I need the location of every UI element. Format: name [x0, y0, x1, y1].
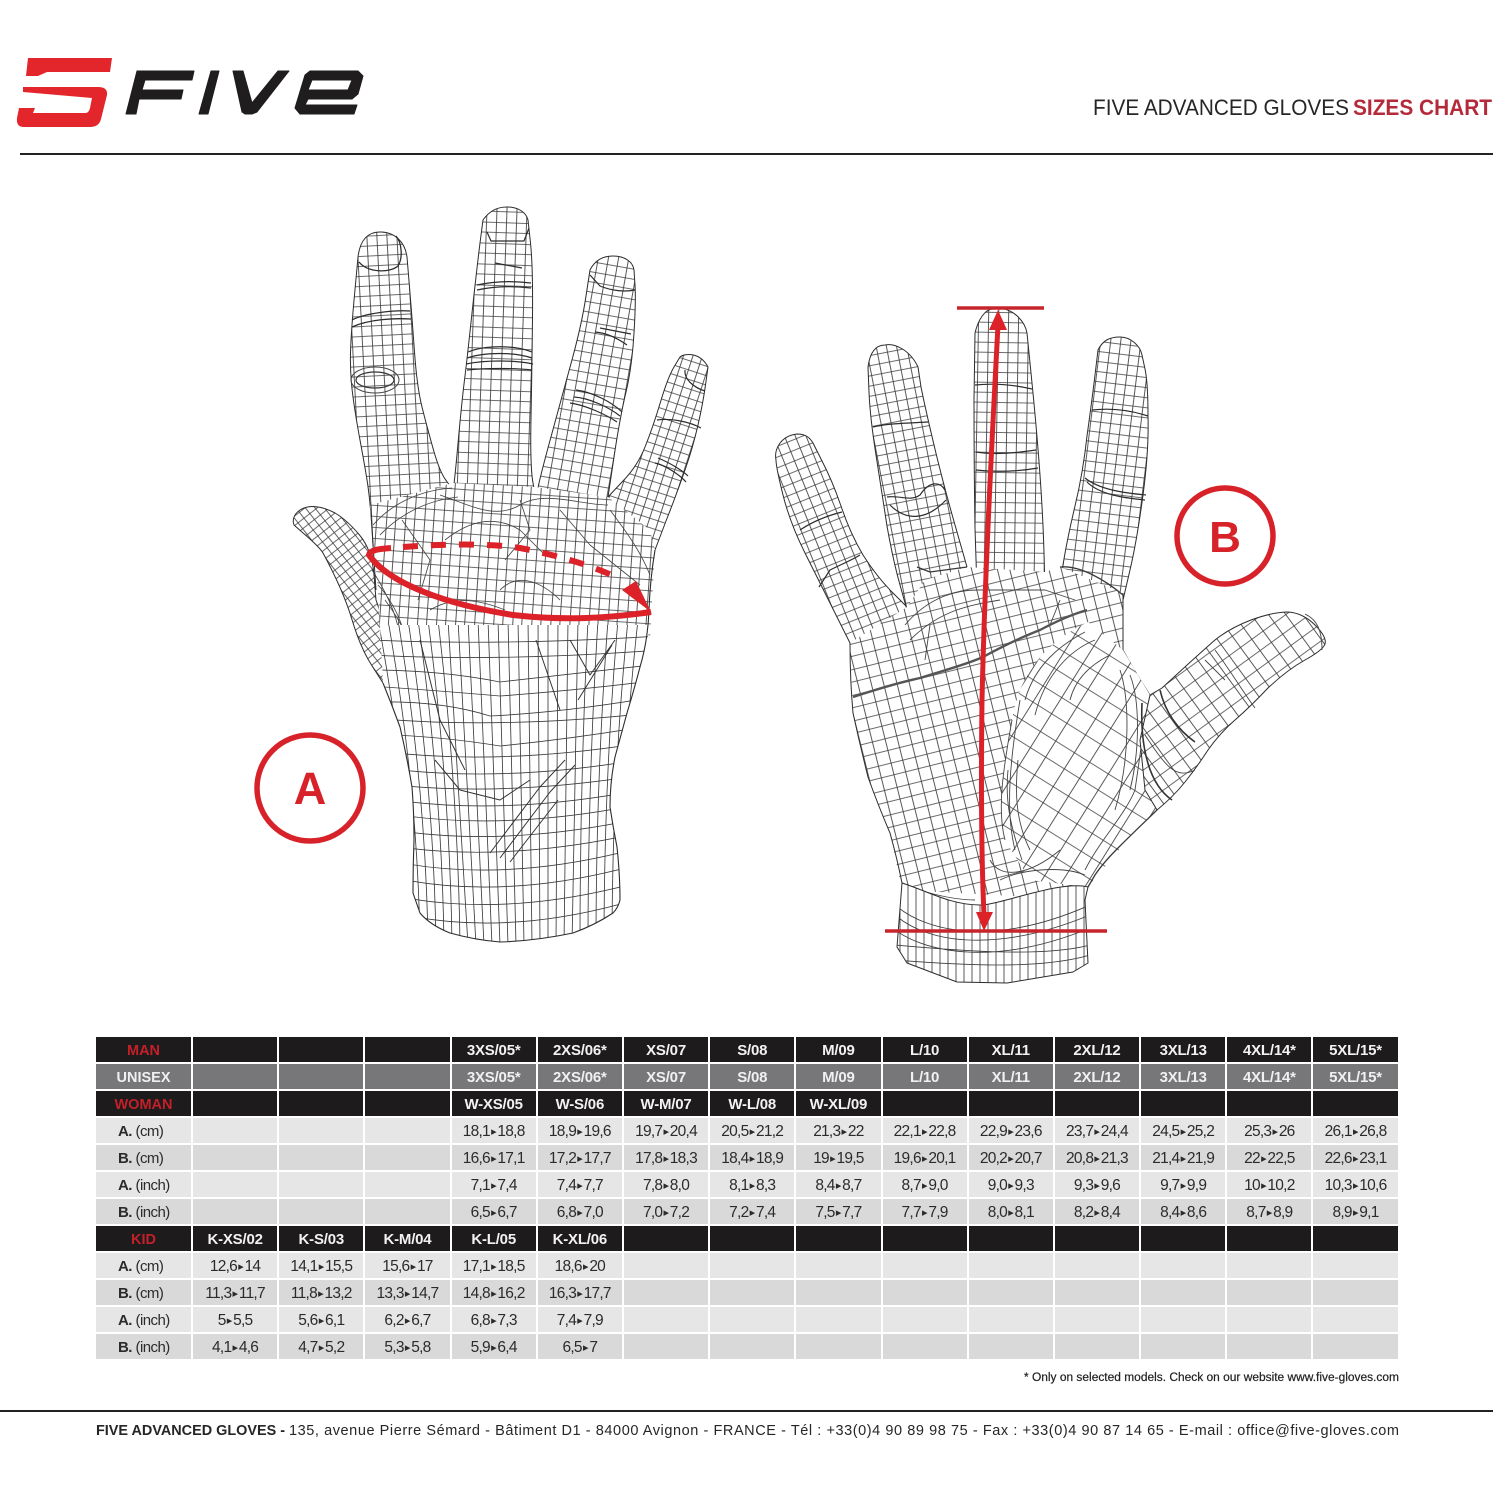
row: kid A inch — [96, 1307, 1398, 1332]
logo wordmark — [126, 71, 363, 114]
finger A1 — [350, 232, 453, 545]
finger B2 — [868, 345, 967, 610]
row: man sizes: MAN — [127, 1043, 160, 1059]
back of hand A mesh — [380, 625, 648, 942]
row: adult B inch: 8,9▸9,1 — [1332, 1204, 1379, 1221]
row: adult B cm: 21,4▸21,9 — [1152, 1150, 1214, 1167]
row: adult B inch: B. (inch) — [118, 1204, 170, 1221]
row: unisex sizes: M/09 — [822, 1069, 855, 1086]
row: adult A inch: 7,1▸7,4 — [471, 1177, 517, 1194]
row: adult A cm: 22,9▸23,6 — [980, 1123, 1042, 1140]
row: adult B inch: 8,4▸8,6 — [1160, 1204, 1206, 1221]
row: woman sizes: W-M/07 — [641, 1096, 692, 1113]
row: kid sizes: K-L/05 — [471, 1231, 516, 1248]
row: kid A cm: 12,6▸14 — [210, 1258, 260, 1275]
row: unisex sizes: 3XS/05* — [467, 1069, 520, 1086]
row: woman sizes: W-XL/09 — [810, 1096, 867, 1113]
row: adult A inch: 10▸10,2 — [1244, 1177, 1295, 1194]
size table — [96, 1037, 1398, 1359]
row: adult B cm — [96, 1145, 1398, 1170]
row: unisex sizes: L/10 — [910, 1069, 939, 1086]
row: man sizes: L/10 — [910, 1042, 939, 1059]
row: adult A inch: 8,4▸8,7 — [815, 1177, 861, 1194]
hand B: palm wireframe — [776, 308, 1325, 983]
row: adult A inch: 10,3▸10,6 — [1325, 1177, 1386, 1194]
footnote: * Only on selected models. Check on our website www.five-gloves.com — [1024, 1372, 1399, 1384]
row: adult B cm: 19,6▸20,1 — [894, 1150, 956, 1167]
row: kid B cm — [96, 1280, 1398, 1305]
row: man sizes: XL/11 — [992, 1042, 1030, 1059]
row: man sizes: XS/07 — [646, 1042, 686, 1059]
row: adult A cm: 19,7▸20,4 — [635, 1123, 697, 1140]
row: woman sizes: W-XS/05 — [464, 1096, 523, 1113]
row: unisex sizes: 4XL/14* — [1243, 1069, 1296, 1086]
row: kid B cm: 16,3▸17,7 — [549, 1285, 611, 1302]
row: kid B cm: 11,3▸11,7 — [205, 1285, 265, 1302]
row: adult A cm: 22,1▸22,8 — [894, 1123, 956, 1140]
row: man sizes — [96, 1037, 1398, 1062]
row: man sizes: 2XS/06* — [553, 1042, 607, 1059]
row: adult A inch — [96, 1172, 1398, 1197]
heading: sizes chart — [1093, 95, 1493, 120]
row: adult A cm: 26,1▸26,8 — [1325, 1123, 1386, 1140]
row: adult A inch: 9,3▸9,6 — [1074, 1177, 1120, 1194]
finger B3 — [974, 308, 1045, 590]
row: adult A cm: A. (cm) — [118, 1123, 163, 1140]
row: kid sizes: K-XS/02 — [207, 1231, 263, 1248]
row: adult B inch: 6,5▸6,7 — [471, 1204, 517, 1221]
row: man sizes: 3XS/05* — [467, 1042, 520, 1059]
row: adult B cm: 18,4▸18,9 — [721, 1150, 783, 1167]
row: adult A cm: 24,5▸25,2 — [1152, 1123, 1214, 1140]
row: kid sizes: K-XL/06 — [553, 1231, 607, 1248]
measurement arrow B: length with end bars — [885, 308, 1107, 931]
row: kid B inch: 6,5▸7 — [562, 1339, 597, 1356]
row: adult A inch: 7,4▸7,7 — [557, 1177, 603, 1194]
row: man sizes: M/09 — [822, 1042, 855, 1059]
badge A — [257, 735, 363, 841]
palm ball mesh B — [1001, 622, 1160, 887]
row: adult A inch: 8,1▸8,3 — [729, 1177, 775, 1194]
row: kid sizes — [96, 1226, 1398, 1251]
row: adult A cm: 25,3▸26 — [1244, 1123, 1295, 1140]
row: adult A inch: A. (inch) — [118, 1177, 170, 1194]
row: woman sizes: W-L/08 — [728, 1096, 776, 1113]
measurement arrow A: dashed and solid curve — [369, 544, 651, 618]
logo icon: red S mark — [17, 58, 112, 127]
row: adult A cm: 18,9▸19,6 — [549, 1123, 611, 1140]
row: unisex sizes: 3XL/13 — [1160, 1069, 1207, 1086]
row: woman sizes: W-S/06 — [556, 1096, 604, 1113]
row: adult B cm: 17,8▸18,3 — [635, 1150, 697, 1167]
finger B4 — [1060, 337, 1148, 600]
row: kid A cm: 18,6▸20 — [555, 1258, 605, 1275]
row: adult B cm: 17,2▸17,7 — [549, 1150, 611, 1167]
row: kid A cm: A. (cm) — [118, 1258, 163, 1275]
footer address: 135, avenue Pierre Sémard - Bâtiment D1 - 84000 Avignon - FRANCE - Tél : +33(0)4 90 89 98 75 - Fax : +33(0)4 90 87 14 65 - E-mail : office@five-gloves.com — [289, 1423, 1399, 1439]
row: adult B inch: 6,8▸7,0 — [557, 1204, 603, 1221]
footer address: FIVE ADVANCED GLOVES - — [96, 1423, 285, 1439]
row: adult B inch: 7,2▸7,4 — [729, 1204, 775, 1221]
palm A — [370, 483, 655, 660]
row: kid B inch: 5,3▸5,8 — [384, 1339, 431, 1356]
row: kid sizes: K-S/03 — [299, 1231, 344, 1248]
row: adult B cm: 22,6▸23,1 — [1325, 1150, 1386, 1167]
row: unisex sizes: 2XL/12 — [1073, 1069, 1121, 1086]
row: woman sizes: WOMAN — [114, 1097, 172, 1113]
row: kid A inch: A. (inch) — [118, 1312, 170, 1329]
row: unisex sizes: 2XS/06* — [553, 1069, 607, 1086]
row: man sizes: S/08 — [737, 1042, 767, 1059]
row: kid B cm: 13,3▸14,7 — [377, 1285, 438, 1302]
palm B — [850, 567, 1150, 900]
row: kid B cm: 11,8▸13,2 — [291, 1285, 352, 1302]
row: adult B cm: 20,2▸20,7 — [980, 1150, 1042, 1167]
wrist B — [895, 883, 1090, 983]
row: man sizes: 4XL/14* — [1243, 1042, 1296, 1059]
row: adult B inch: 8,2▸8,4 — [1074, 1204, 1120, 1221]
row: kid A cm: 14,1▸15,5 — [290, 1258, 352, 1275]
row: adult B inch: 7,5▸7,7 — [815, 1204, 861, 1221]
row: adult B cm: 20,8▸21,3 — [1066, 1150, 1128, 1167]
row: adult B inch: 8,0▸8,1 — [988, 1204, 1034, 1221]
row: unisex sizes: XS/07 — [646, 1069, 686, 1086]
row: adult A cm: 23,7▸24,4 — [1066, 1123, 1128, 1140]
row: adult B inch: 7,7▸7,9 — [902, 1204, 948, 1221]
finger B1 — [776, 434, 907, 643]
badge A: A — [294, 763, 326, 814]
badge B: B — [1209, 513, 1241, 562]
row: unisex sizes: UNISEX — [116, 1070, 170, 1086]
row: adult B cm: 22▸22,5 — [1244, 1150, 1295, 1167]
row: unisex sizes — [96, 1064, 1398, 1089]
thumb B — [1140, 612, 1325, 810]
row: man sizes: 3XL/13 — [1160, 1042, 1207, 1059]
row: kid A inch: 5▸5,5 — [218, 1312, 252, 1329]
row: adult B cm: B. (cm) — [118, 1150, 163, 1167]
row: kid sizes: KID — [131, 1232, 156, 1248]
row: kid B cm: B. (cm) — [118, 1285, 163, 1302]
heading: sizes chart: FIVE ADVANCED GLOVES — [1093, 95, 1349, 120]
row: adult B cm: 19▸19,5 — [813, 1150, 864, 1167]
row: adult A inch: 9,0▸9,3 — [988, 1177, 1034, 1194]
row: kid B inch: B. (inch) — [118, 1339, 170, 1356]
outline A — [383, 550, 655, 942]
row: kid B cm: 14,8▸16,2 — [463, 1285, 525, 1302]
row: kid A inch: 5,6▸6,1 — [298, 1312, 344, 1329]
row: kid A cm: 17,1▸18,5 — [463, 1258, 525, 1275]
row: adult A cm: 18,1▸18,8 — [463, 1123, 525, 1140]
badge B — [1177, 488, 1273, 584]
row: adult A inch: 8,7▸9,0 — [902, 1177, 948, 1194]
row: adult A cm: 20,5▸21,2 — [721, 1123, 783, 1140]
finger creases B — [917, 567, 1157, 887]
row: kid B inch — [96, 1334, 1398, 1359]
row: unisex sizes: XL/11 — [992, 1069, 1030, 1086]
finger A4 — [605, 354, 708, 550]
row: kid B inch: 4,1▸4,6 — [212, 1339, 258, 1356]
row: kid B inch: 5,9▸6,4 — [471, 1339, 517, 1356]
logo: FIVE — [17, 58, 363, 127]
row: adult A cm: 21,3▸22 — [813, 1123, 864, 1140]
thumb A — [293, 507, 390, 683]
row: adult B inch: 8,7▸8,9 — [1246, 1204, 1292, 1221]
row: adult B cm: 16,6▸17,1 — [463, 1150, 525, 1167]
row: kid A cm: 15,6▸17 — [382, 1258, 433, 1275]
row: unisex sizes: S/08 — [737, 1069, 767, 1086]
row: adult B inch — [96, 1199, 1398, 1224]
row: man sizes: 5XL/15* — [1329, 1042, 1382, 1059]
row: kid sizes: K-M/04 — [383, 1231, 431, 1248]
row: woman sizes — [96, 1091, 1398, 1116]
row: kid B inch: 4,7▸5,2 — [298, 1339, 344, 1356]
row: kid A inch: 6,2▸6,7 — [384, 1312, 431, 1329]
row: adult A cm — [96, 1118, 1398, 1143]
row: unisex sizes: 5XL/15* — [1329, 1069, 1382, 1086]
row: kid A cm — [96, 1253, 1398, 1278]
row: adult A inch: 9,7▸9,9 — [1160, 1177, 1206, 1194]
palm folds B — [902, 590, 1145, 900]
hand A: back of hand wireframe — [293, 207, 708, 950]
finger A3 — [536, 256, 635, 510]
row: kid A inch: 7,4▸7,9 — [557, 1312, 603, 1329]
finger A2 — [452, 207, 536, 500]
row: adult B inch: 7,0▸7,2 — [643, 1204, 689, 1221]
row: kid A inch: 6,8▸7,3 — [471, 1312, 517, 1329]
row: man sizes: 2XL/12 — [1073, 1042, 1121, 1059]
row: adult A inch: 7,8▸8,0 — [643, 1177, 689, 1194]
